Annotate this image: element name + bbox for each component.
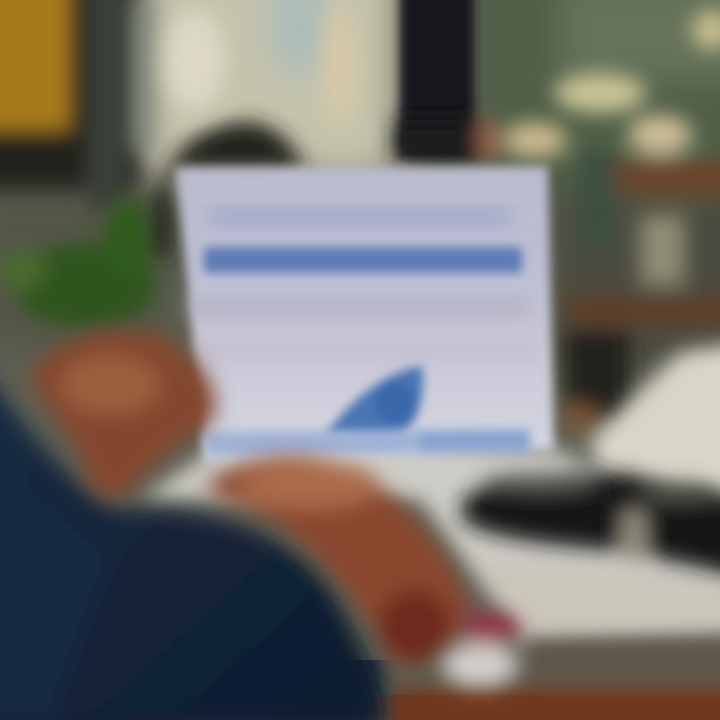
blue logo shape on the card xyxy=(325,366,423,440)
bottom edge strip: sleeve and wood xyxy=(0,660,720,720)
wooden table, bottom xyxy=(395,640,720,720)
finger, upper left xyxy=(30,330,215,497)
blue band on the card xyxy=(204,247,522,273)
lower hand and palm xyxy=(205,456,470,666)
green plant, left of the card xyxy=(0,198,157,327)
card held in the hand xyxy=(176,166,554,462)
card body xyxy=(176,166,554,462)
dark arch behind the card xyxy=(145,5,502,260)
faint lines on the card xyxy=(190,300,535,357)
black glasses on the desk xyxy=(462,472,720,578)
red and white object near the wrist xyxy=(442,613,520,687)
shelves and decor, right side xyxy=(503,10,720,433)
blue strip at the card bottom xyxy=(200,428,532,456)
white desk surface and papers xyxy=(140,340,720,645)
navy sleeve xyxy=(0,340,385,720)
blurred heading text on the card xyxy=(210,208,510,226)
dark column, top centre xyxy=(400,0,474,156)
window frame and yellow poster, top left xyxy=(0,0,155,210)
hand: fingers holding the card xyxy=(30,330,470,666)
background: room behind the card xyxy=(0,0,720,370)
